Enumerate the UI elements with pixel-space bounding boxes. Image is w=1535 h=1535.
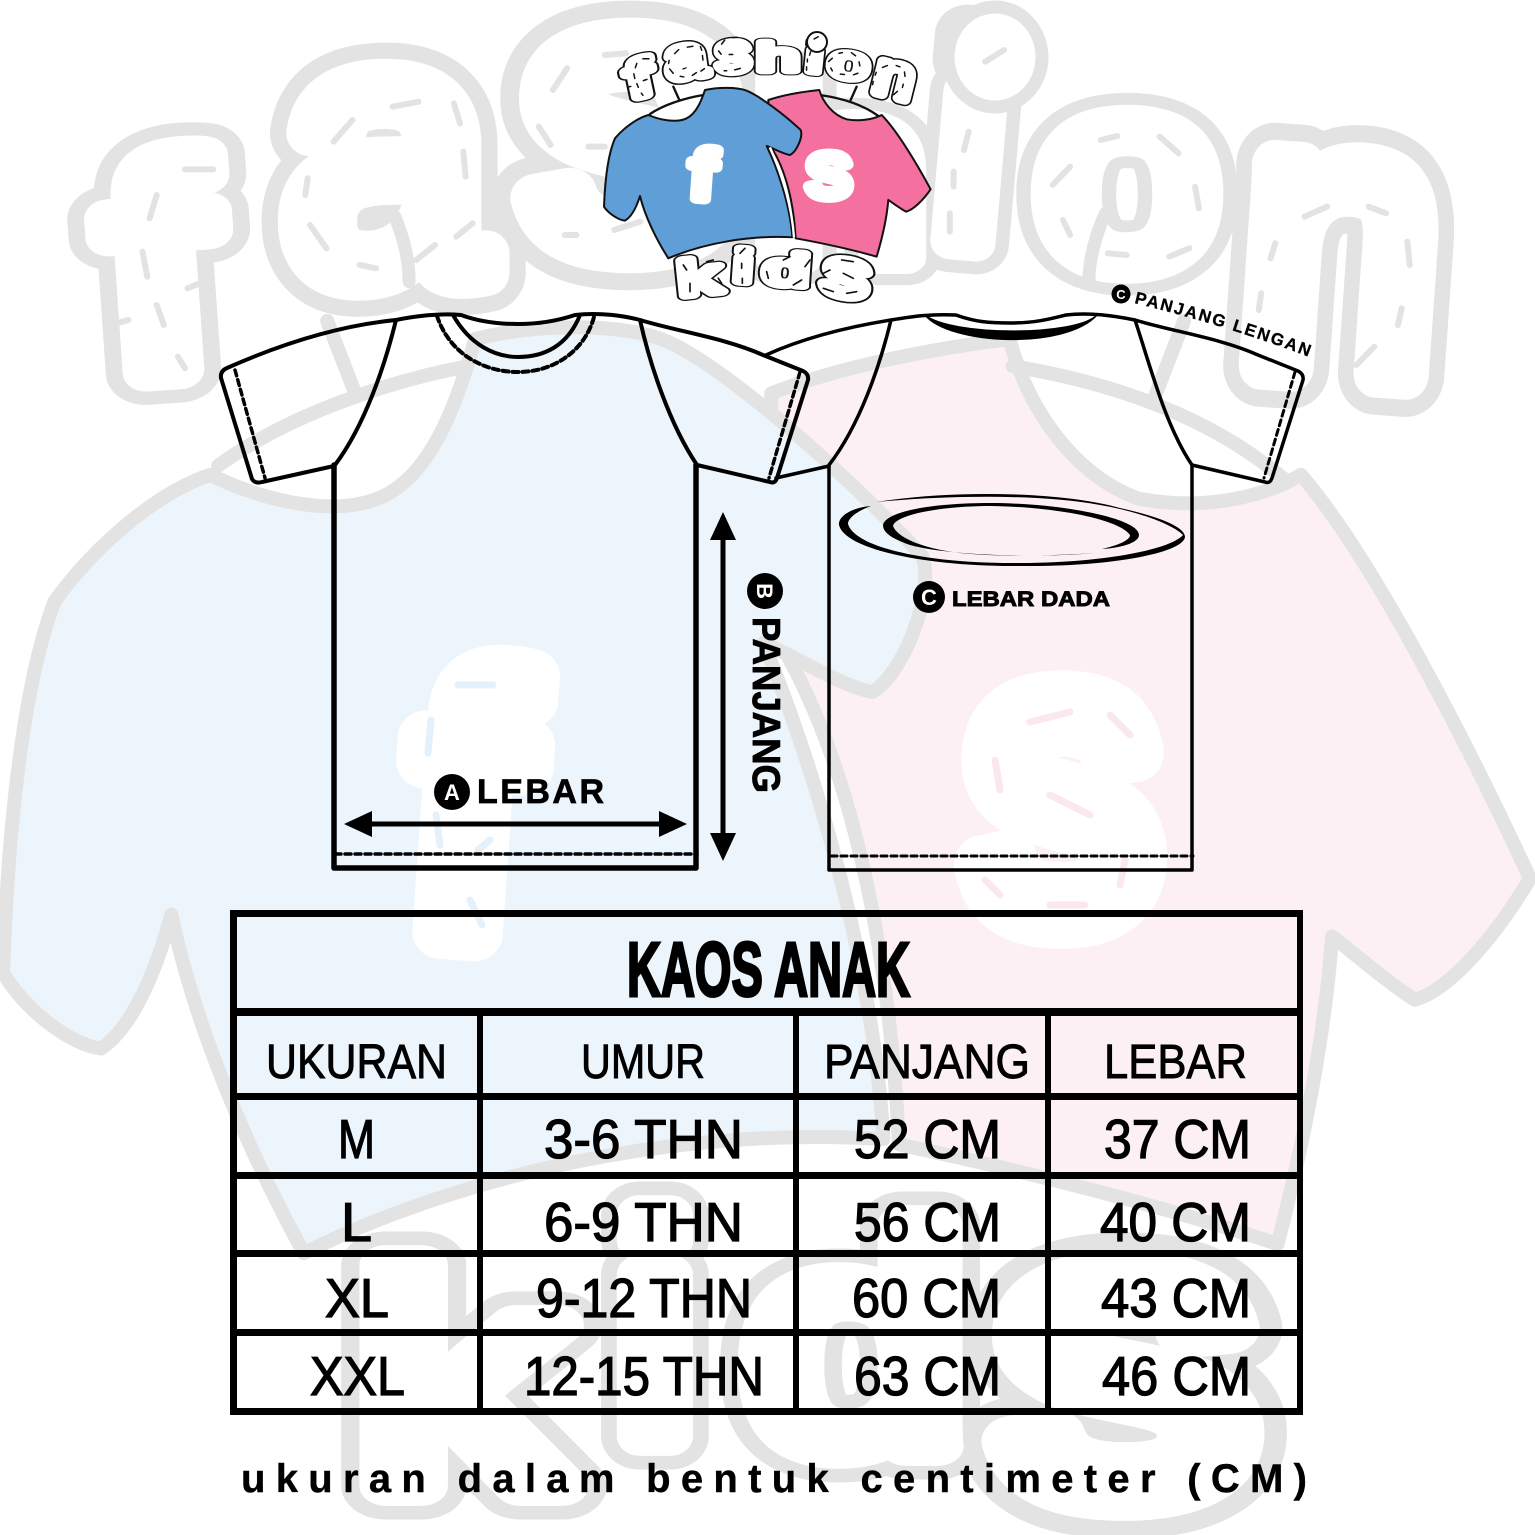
logo: white gap between shirts xyxy=(770,147,794,237)
table title: KAOS ANAK xyxy=(627,927,910,1013)
logo: word fashion: h xyxy=(757,35,799,80)
logo: word kids: d xyxy=(762,243,810,296)
logo: Fashion Kids xyxy=(604,22,931,313)
header row: PANJANG xyxy=(824,1036,1030,1089)
row XL: 43 CM xyxy=(1101,1267,1251,1329)
row M: 3-6 THN xyxy=(544,1108,743,1170)
watermark: stitches on big white letters xyxy=(428,685,493,925)
watermark: big word fashion: f xyxy=(95,100,224,438)
watermark: big word kids xyxy=(359,1129,1250,1535)
watermark: big word fashion: f xyxy=(95,100,224,438)
row L xyxy=(341,1191,1251,1253)
row XXL: XXL xyxy=(310,1345,405,1407)
header row: LEBAR xyxy=(1104,1036,1247,1089)
label: B PANJANG: PANJANG xyxy=(744,617,787,793)
logo: stitches on kids xyxy=(683,248,857,293)
row L: 40 CM xyxy=(1100,1191,1251,1253)
row M: 52 CM xyxy=(854,1108,1001,1170)
watermark: big word fashion: o xyxy=(1038,26,1216,321)
logo: word fashion: f xyxy=(621,48,658,110)
watermark: big word fashion: h xyxy=(754,35,926,311)
label: C LEBAR DADA: LEBAR DADA xyxy=(952,588,1110,611)
logo: word fashion: n xyxy=(868,39,922,113)
row L: L xyxy=(341,1191,372,1253)
watermark: big word fashion: h xyxy=(754,35,926,311)
logo: word fashion: s xyxy=(715,22,752,83)
logo: word kids: i xyxy=(732,240,754,292)
logo: word fashion: a xyxy=(661,23,710,92)
label: A LEBAR: LEBAR xyxy=(477,773,604,811)
logo: word fashion xyxy=(621,22,922,113)
logo: word kids: s xyxy=(818,234,875,313)
label: C LEBAR DADA: C xyxy=(921,585,937,610)
logo: letter f on blue shirt: f xyxy=(687,136,718,216)
logo: word kids: s xyxy=(818,234,875,313)
logo: word kids: k xyxy=(676,248,724,307)
size table xyxy=(230,910,1303,1415)
row M: 37 CM xyxy=(1104,1108,1251,1170)
logo: word fashion: f xyxy=(621,48,658,110)
logo: word fashion: n xyxy=(868,39,922,113)
logo: word fashion: i xyxy=(804,34,825,82)
watermark: big word fashion xyxy=(95,0,1453,457)
front neck xyxy=(453,315,580,357)
watermark: big word fashion: n xyxy=(1232,20,1453,457)
back t-shirt outline (right) xyxy=(766,314,1303,870)
logo: word kids: k xyxy=(676,248,724,307)
label: C LEBAR DADA xyxy=(913,581,1110,613)
watermark: big word fashion: n xyxy=(1232,20,1453,457)
header row: UKURAN xyxy=(266,1036,447,1089)
row XL: 9-12 THN xyxy=(536,1267,752,1329)
logo: stitches on fashion xyxy=(628,37,905,95)
row XXL: 63 CM xyxy=(854,1345,1001,1407)
header row: UMUR xyxy=(581,1036,705,1089)
label: A LEBAR: A xyxy=(444,780,460,805)
logo: blue shirt xyxy=(604,88,801,258)
logo: word kids: i xyxy=(732,240,754,292)
logo: word fashion: o xyxy=(826,34,873,91)
row XL: 60 CM xyxy=(852,1267,1001,1329)
row XXL: 46 CM xyxy=(1102,1345,1251,1407)
footer note: ukuran dalam bentuk centimeter (CM) xyxy=(241,1457,1307,1501)
row M xyxy=(338,1108,1251,1170)
watermark: big white letter f: f xyxy=(402,600,537,1014)
logo: word fashion: i xyxy=(804,34,825,82)
label: C PANJANG LENGAN: PANJANG LENGAN xyxy=(1134,292,1312,356)
logo: word fashion: o xyxy=(826,34,873,91)
watermark: big word fashion: o xyxy=(1038,26,1216,321)
front t-shirt outline (left) xyxy=(221,314,808,868)
row XL: XL xyxy=(325,1267,389,1329)
logo: letter s on pink shirt: s xyxy=(807,126,851,213)
row XL xyxy=(325,1267,1251,1329)
sleeve and hem stitches xyxy=(235,370,800,854)
watermark: big word kids: d xyxy=(747,1171,963,1511)
label: C PANJANG LENGAN: C xyxy=(1116,287,1126,302)
back neck collar xyxy=(925,315,1097,339)
logo: word fashion: s xyxy=(715,22,752,83)
row XXL: 12-15 THN xyxy=(524,1345,764,1407)
chest print swoosh xyxy=(839,494,1185,566)
watermark: big word kids: i xyxy=(616,1160,694,1501)
arrow: width xyxy=(344,811,687,837)
logo: word kids: d xyxy=(762,243,810,296)
arrow: length xyxy=(710,512,736,861)
watermark: big white letter s: s xyxy=(971,554,1153,1001)
watermark: large pastel t-shirts xyxy=(3,321,1530,1253)
watermark: big word kids: d xyxy=(747,1171,963,1511)
row L: 56 CM xyxy=(854,1191,1001,1253)
logo: word kids xyxy=(676,234,875,313)
row M: M xyxy=(338,1108,375,1170)
watermark: big word kids: i xyxy=(616,1160,694,1501)
header row xyxy=(266,1036,1247,1089)
row L: 6-9 THN xyxy=(544,1191,743,1253)
table grid xyxy=(230,910,1303,1415)
logo: word fashion: a xyxy=(661,23,710,92)
logo: hangers xyxy=(650,87,878,116)
logo: word fashion: h xyxy=(757,35,799,80)
row XXL xyxy=(310,1345,1251,1407)
logo: pink shirt xyxy=(768,90,931,257)
label: B PANJANG: B xyxy=(752,583,777,599)
